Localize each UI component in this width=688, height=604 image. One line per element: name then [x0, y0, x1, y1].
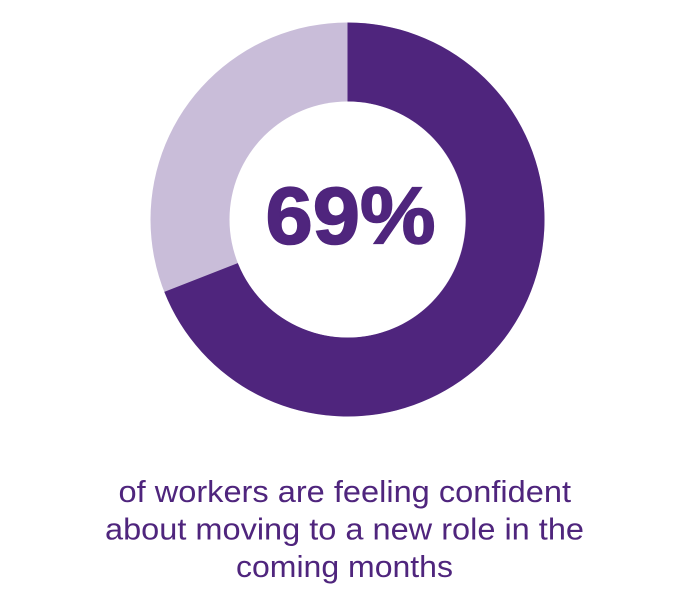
caption text — [105, 474, 584, 584]
percentage value: 69% — [266, 171, 436, 261]
caption text: of workers are feeling confident — [118, 474, 571, 509]
donut segment: remaining 31% — [150, 22, 544, 416]
caption text: coming months — [236, 549, 453, 584]
donut segment: 69% — [164, 22, 545, 416]
donut chart: 69% — [150, 22, 545, 416]
donut centre hole — [230, 102, 466, 338]
caption text: about moving to a new role in the — [105, 512, 584, 546]
